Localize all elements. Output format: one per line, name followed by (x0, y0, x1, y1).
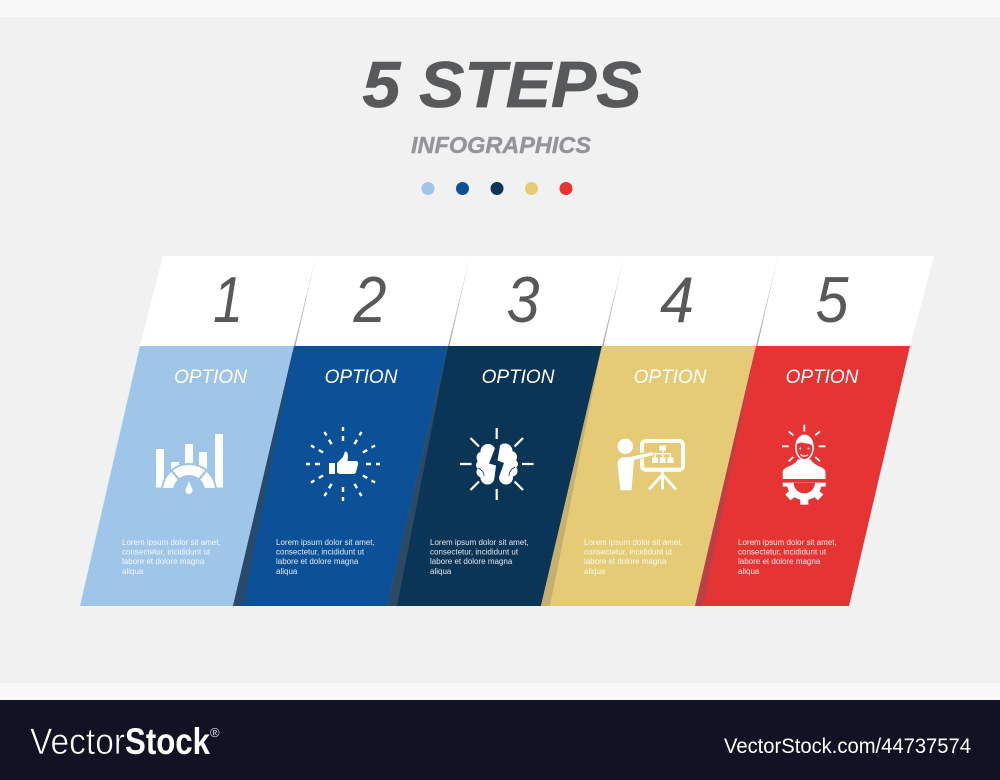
subtitle: INFOGRAPHICS (411, 132, 591, 158)
icon: presenter at board (618, 439, 683, 490)
white number band (140, 256, 934, 346)
description 5: consectetur, incididunt ut (738, 548, 827, 557)
description 1: Lorem ipsum dolor sit amet, (122, 538, 221, 547)
footer image id: VectorStock.com/44737574 (724, 735, 971, 758)
footer logo: Stock (125, 721, 210, 762)
panel 4 (541, 256, 756, 606)
description 5: aliqua (738, 567, 760, 576)
description 3: consectetur, incididunt ut (430, 548, 519, 557)
description 3: labore et dolore magna (430, 557, 513, 566)
panel 2 (233, 256, 448, 606)
option label 5: OPTION (786, 367, 859, 388)
icon: brain with lightning (460, 428, 534, 500)
icon: person with idea and gear (782, 425, 826, 505)
description 2: labore et dolore magna (276, 557, 359, 566)
description 4: labore et dolore magna (584, 557, 667, 566)
footer logo: Vector (30, 721, 125, 762)
description 1: consectetur, incididunt ut (122, 548, 211, 557)
description 5: labore et dolore magna (738, 557, 821, 566)
option label 3: OPTION (482, 367, 555, 388)
option label 1: OPTION (174, 367, 247, 388)
number 4: 4 (660, 263, 694, 336)
description 4: Lorem ipsum dolor sit amet, (584, 538, 683, 547)
number 3: 3 (506, 263, 540, 336)
description 5: Lorem ipsum dolor sit amet, (738, 538, 837, 547)
number 2: 2 (353, 263, 386, 336)
icon: gauge and bars (156, 434, 223, 494)
legend dots (422, 182, 572, 195)
description 2: consectetur, incididunt ut (276, 548, 365, 557)
title: 5 STEPS (362, 48, 642, 121)
description 1: labore et dolore magna (122, 557, 205, 566)
panel 5 (695, 256, 910, 606)
option label 2: OPTION (325, 367, 398, 388)
description 2: Lorem ipsum dolor sit amet, (276, 538, 375, 547)
panel 3 (387, 256, 602, 606)
description 4: consectetur, incididunt ut (584, 548, 673, 557)
description 1: aliqua (122, 567, 144, 576)
footer logo (30, 721, 220, 762)
icon: thumbs up with rays (306, 427, 380, 501)
footer bar (0, 700, 1000, 780)
option label 4: OPTION (634, 367, 707, 388)
footer logo: ® (210, 725, 220, 740)
description 3: aliqua (430, 567, 452, 576)
description 2: aliqua (276, 567, 298, 576)
description 3: Lorem ipsum dolor sit amet, (430, 538, 529, 547)
number 1: 1 (213, 263, 243, 336)
panel 1 (80, 263, 294, 606)
number 5: 5 (816, 263, 849, 336)
description 4: aliqua (584, 567, 606, 576)
